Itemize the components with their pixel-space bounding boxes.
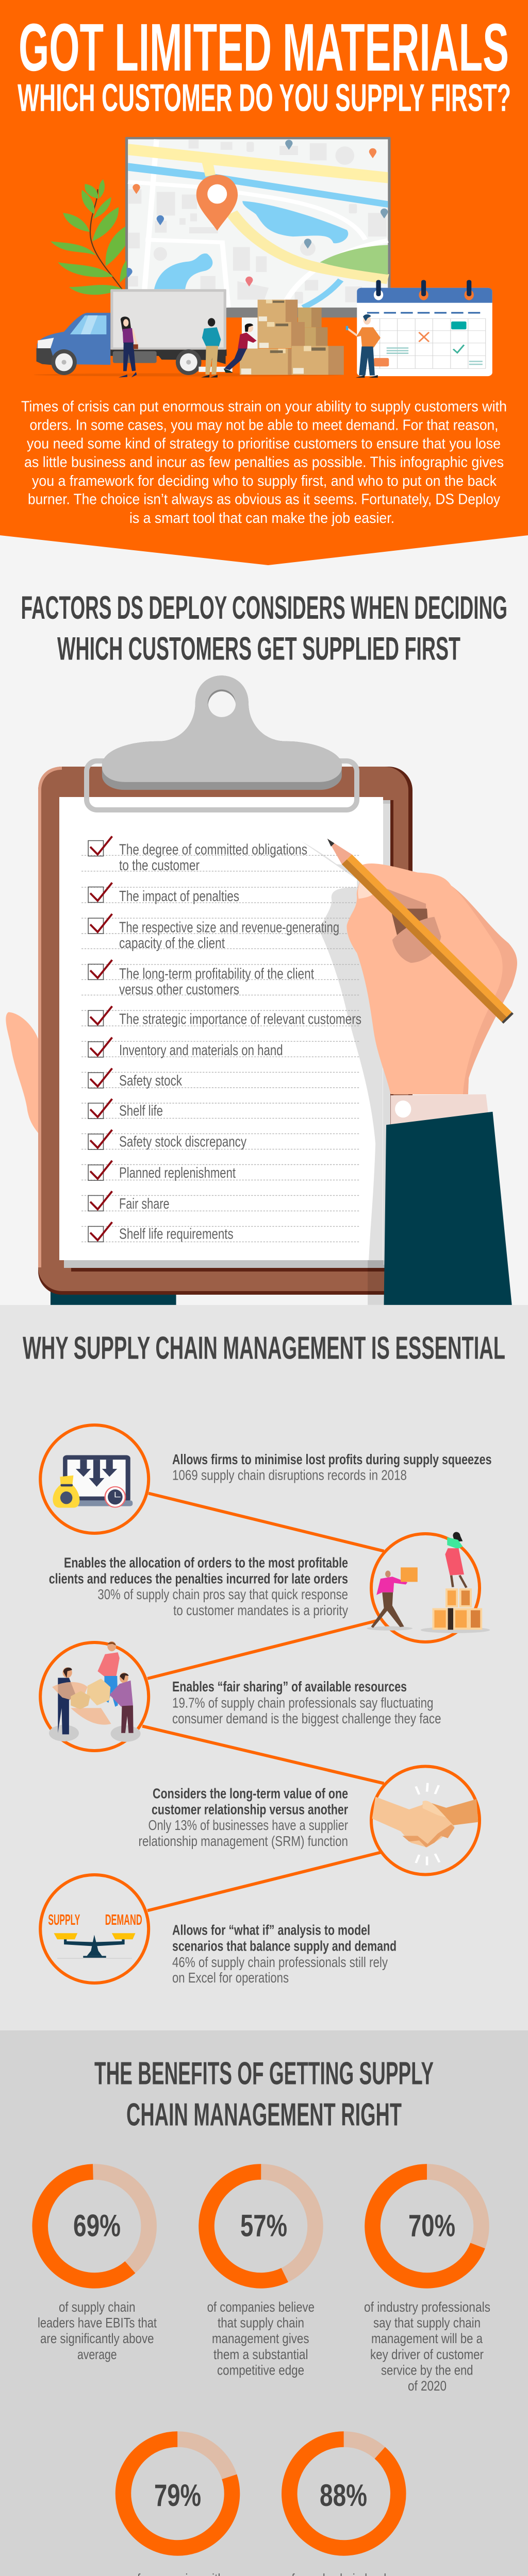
- checklist text: Shelf life: [119, 1103, 163, 1119]
- pencil: [327, 839, 352, 865]
- checklist text: Planned replenishment: [119, 1165, 236, 1181]
- boxes: [240, 300, 344, 375]
- icons: small map pins: [125, 140, 388, 286]
- checklist text: Shelf life requirements: [119, 1226, 234, 1243]
- value 69%: 69%: [73, 2208, 121, 2243]
- text: 19.7% of supply chain professionals say fluctuating: [172, 1694, 433, 1710]
- item 1: minimise lost profits: [40, 1425, 491, 1533]
- text: 30% of supply chain pros say that quick response: [97, 1586, 348, 1602]
- icon: circle with three people and boxes: [40, 1641, 148, 1751]
- donut chart 57%: [188, 2154, 334, 2299]
- text: [172, 1922, 397, 1986]
- donut chart 70%: [357, 2156, 497, 2296]
- intro paragraph: you a framework for deciding who to supply first, and who to put on the back: [32, 473, 497, 489]
- icon: circle with supply and demand scale: DEMAND: [105, 1912, 142, 1928]
- panel: orange hero: [0, 0, 528, 565]
- caption: of 2020: [408, 2378, 447, 2394]
- item 4: long-term value: [138, 1766, 480, 1874]
- icon: circle with supply and demand scale: [40, 1875, 148, 1983]
- checklist text: The long-term profitability of the client: [119, 965, 314, 982]
- panel: benefits: [18, 2056, 497, 2576]
- checklist text: The impact of penalties: [119, 888, 239, 905]
- shadow of hand on paper: [81, 841, 385, 1305]
- stat: 57%: [188, 2154, 334, 2378]
- caption: them a substantial: [213, 2347, 308, 2362]
- item 3: fair sharing: [40, 1641, 441, 1751]
- intro paragraph: [21, 399, 507, 527]
- value 79%: 79%: [154, 2478, 201, 2513]
- person: man pushing boxes: [224, 324, 257, 372]
- text: [172, 1451, 492, 1483]
- caption: key driver of customer: [370, 2347, 484, 2362]
- stat: 79%: [109, 2425, 246, 2576]
- checklist text: versus other customers: [119, 981, 239, 998]
- heading: benefits: [94, 2056, 434, 2132]
- text: [172, 1679, 441, 1726]
- intro paragraph: as little business and incur as few penalties as possible. This infographic gives: [24, 454, 504, 471]
- caption: service by the end: [381, 2362, 473, 2378]
- plant: [51, 179, 127, 295]
- text: Considers the long-term value of one: [153, 1786, 348, 1802]
- clip plate: [102, 675, 342, 790]
- checklist text: [119, 841, 361, 1243]
- hero illustration: [34, 137, 492, 378]
- sleeve: [384, 1112, 512, 1305]
- text: [138, 1786, 348, 1849]
- checklist text: Safety stock: [119, 1073, 182, 1089]
- checklist text: Fair share: [119, 1196, 169, 1212]
- donut chart 69%: [18, 2149, 171, 2303]
- truck: [34, 289, 343, 377]
- text: scenarios that balance supply and demand: [172, 1938, 397, 1954]
- right hand with pencil: [327, 839, 517, 1305]
- person: man in teal: [201, 318, 221, 378]
- hero background with chevron: [0, 0, 528, 565]
- checklist text: to the customer: [119, 857, 200, 874]
- checklist text: The respective size and revenue-generating: [119, 920, 339, 936]
- item 2: allocation of orders: [49, 1532, 490, 1642]
- text: Allows for “what if” analysis to model: [172, 1922, 370, 1938]
- text: clients and reduces the penalties incurred for late orders: [49, 1570, 348, 1587]
- icon: circle with handshake: [371, 1766, 480, 1874]
- caption: management will be a: [371, 2331, 483, 2346]
- hand: [347, 863, 517, 1094]
- clip wire: [87, 761, 357, 810]
- donut chart 88%: [267, 2417, 421, 2570]
- person: man with phone: [346, 314, 381, 378]
- value 57%: 57%: [240, 2208, 287, 2243]
- caption: management gives: [212, 2331, 309, 2346]
- panel: why supply chain management is essential: [23, 1330, 505, 1986]
- intro paragraph: is a smart tool that can make the job easier.: [129, 510, 394, 527]
- text: 1069 supply chain disruptions records in 2018: [172, 1467, 407, 1483]
- text: Enables the allocation of orders to the most profitable: [64, 1554, 348, 1570]
- caption: competitive edge: [217, 2362, 304, 2378]
- value 70%: 70%: [408, 2208, 455, 2243]
- section backgrounds: [0, 515, 528, 2576]
- checklist text: Safety stock discrepancy: [119, 1133, 246, 1150]
- caption: leaders have EBITs that: [38, 2315, 157, 2331]
- caption: of supply chain: [59, 2299, 135, 2315]
- checklist text: The degree of committed obligations: [119, 841, 307, 858]
- left hand and sleeve: [6, 1012, 176, 1305]
- intro paragraph: you need some kind of strategy to prioritise customers to ensure that you lose: [27, 435, 501, 452]
- stat: 69%: [18, 2149, 171, 2362]
- stat: 70%: [357, 2156, 497, 2394]
- caption: of industry professionals: [364, 2299, 490, 2315]
- caption: [364, 2299, 490, 2394]
- checklist text: Inventory and materials on hand: [119, 1042, 283, 1059]
- icon: main map pin: [196, 175, 238, 231]
- item 5: what-if analysis: [40, 1875, 397, 1986]
- heading: factors: [21, 590, 507, 667]
- value 88%: 88%: [320, 2478, 367, 2513]
- icons: checkboxes: [88, 836, 112, 1242]
- icon: circle with supply and demand scale: SUPPLY: [48, 1912, 80, 1928]
- caption: say that supply chain: [373, 2315, 481, 2331]
- text: [49, 1554, 348, 1618]
- text: to customer mandates is a priority: [173, 1602, 348, 1618]
- text: on Excel for operations: [172, 1970, 289, 1986]
- text: Enables “fair sharing” of available resources: [172, 1679, 407, 1694]
- sleeve cuff: [391, 1094, 489, 1126]
- text: 46% of supply chain professionals still rely: [172, 1954, 388, 1970]
- caption: are significantly above: [40, 2331, 154, 2346]
- text: Only 13% of businesses have a supplier: [148, 1817, 348, 1833]
- caption: that supply chain: [218, 2315, 304, 2331]
- person: woman: [119, 316, 138, 378]
- clipboard: [38, 675, 412, 1305]
- map board: [125, 137, 391, 349]
- board: [38, 767, 412, 1295]
- text: relationship management (SRM) function: [138, 1833, 348, 1849]
- caption: average: [77, 2347, 117, 2362]
- caption: [207, 2299, 315, 2378]
- paper: [59, 797, 393, 1272]
- calendar: [357, 280, 492, 376]
- icon: circle with people and crates: [367, 1532, 490, 1642]
- connector lines: [142, 1493, 384, 1910]
- stat: 88%: [267, 2417, 421, 2576]
- title: [18, 9, 511, 120]
- checklist text: The strategic importance of relevant customers: [119, 1011, 361, 1027]
- icon: circle with laptop and money bag: [40, 1425, 148, 1533]
- text: consumer demand is the biggest challenge they face: [172, 1710, 441, 1726]
- checklist text: capacity of the client: [119, 935, 225, 952]
- donut chart 79%: [109, 2425, 246, 2562]
- panel: factors DS Deploy considers: [6, 590, 517, 1305]
- caption: [38, 2299, 157, 2362]
- text: customer relationship versus another: [152, 1801, 348, 1817]
- caption: of companies believe: [207, 2299, 315, 2315]
